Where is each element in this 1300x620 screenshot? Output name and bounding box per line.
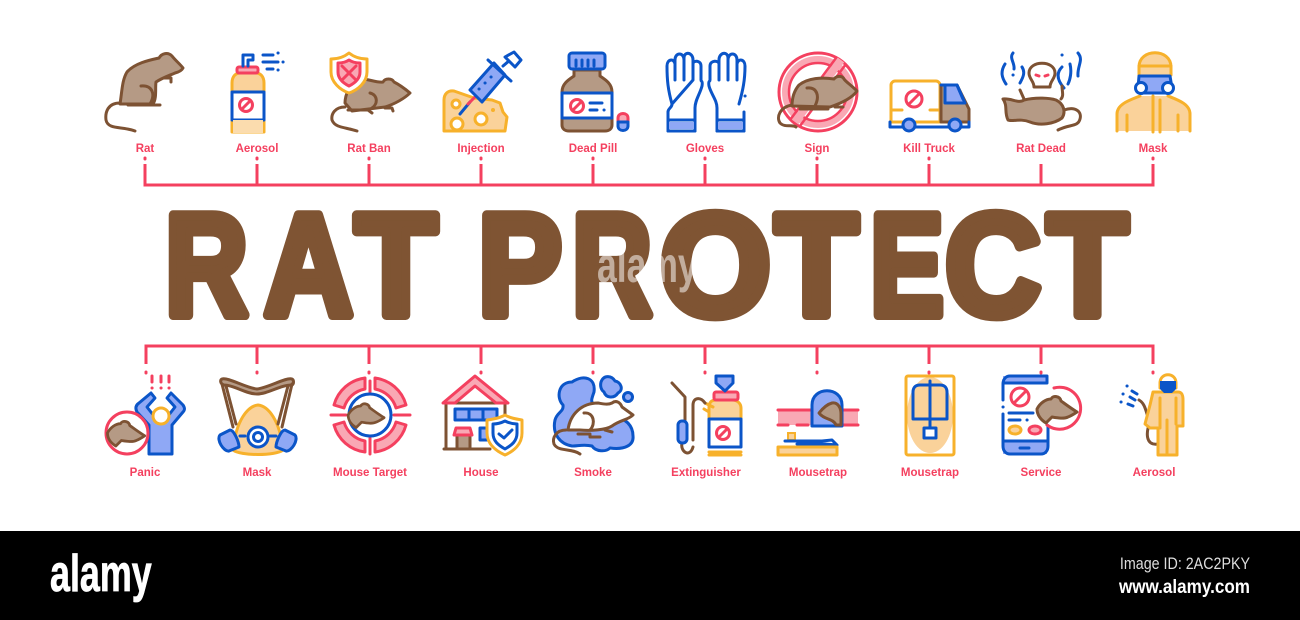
icon: rat [106, 54, 183, 131]
label: Rat Dead: Rat Dead [1016, 143, 1066, 155]
icon: rat dead [1002, 53, 1080, 130]
label: Aerosol: Aerosol [236, 143, 278, 155]
label: Sign: Sign [805, 143, 829, 155]
label: Gloves: Gloves [686, 143, 724, 155]
title: R [572, 184, 652, 346]
label: Kill Truck: Kill Truck [903, 143, 955, 155]
title: C [945, 184, 1041, 346]
icon: smoke [554, 377, 633, 454]
label: Rat Ban: Rat Ban [347, 143, 391, 155]
logo: alamy: alamy [50, 546, 152, 603]
label: Mousetrap: Mousetrap [901, 467, 959, 479]
icon: injection [444, 52, 521, 131]
label: Mouse Target: Mouse Target [333, 467, 407, 479]
label: Smoke: Smoke [574, 467, 612, 479]
label: Injection: Injection [457, 143, 505, 155]
icon: house [443, 376, 522, 455]
title: T [1047, 184, 1128, 346]
footer bar [0, 531, 1300, 620]
icon: respirator mask [219, 379, 296, 454]
title: E [870, 184, 944, 346]
icon: sprayer person [1121, 375, 1183, 455]
label: Dead Pill: Dead Pill [569, 143, 617, 155]
title: A [264, 184, 353, 346]
icon: kill truck [890, 81, 969, 131]
icon: extinguisher [672, 376, 741, 455]
icon: no rats sign [778, 53, 857, 131]
label: Aerosol: Aerosol [1133, 467, 1175, 479]
title: T [355, 184, 437, 346]
top connector bracket [145, 158, 1153, 185]
title: O [660, 184, 771, 346]
icon: service phone [1003, 376, 1081, 454]
website: www.alamy.com [1118, 576, 1250, 597]
title: alamy [597, 238, 698, 294]
label: Panic: Panic [130, 467, 161, 479]
icon: dead pill [562, 53, 628, 131]
title: R [165, 184, 248, 346]
icon: mousetrap with hole [778, 391, 858, 455]
title [165, 184, 1128, 346]
icon: rat ban [331, 53, 410, 131]
label: Mask: Mask [243, 467, 272, 479]
icon: mask suit [1117, 53, 1190, 132]
icon: mouse target [331, 378, 410, 454]
icon: gloves [667, 53, 745, 131]
label: Rat: Rat [136, 143, 154, 155]
title: T [775, 184, 858, 346]
title: P [478, 184, 562, 346]
label: Extinguisher: Extinguisher [671, 467, 741, 479]
bottom connector bracket [146, 346, 1153, 373]
label: Service: Service [1021, 467, 1061, 479]
image id: Image ID: 2AC2PKY [1120, 555, 1250, 573]
label: Mousetrap: Mousetrap [789, 467, 847, 479]
label: House: House [463, 467, 499, 479]
label: Mask: Mask [1139, 143, 1168, 155]
icon: panic [106, 376, 184, 454]
icon: aerosol [232, 53, 283, 133]
icon: mousetrap top view [906, 376, 954, 455]
